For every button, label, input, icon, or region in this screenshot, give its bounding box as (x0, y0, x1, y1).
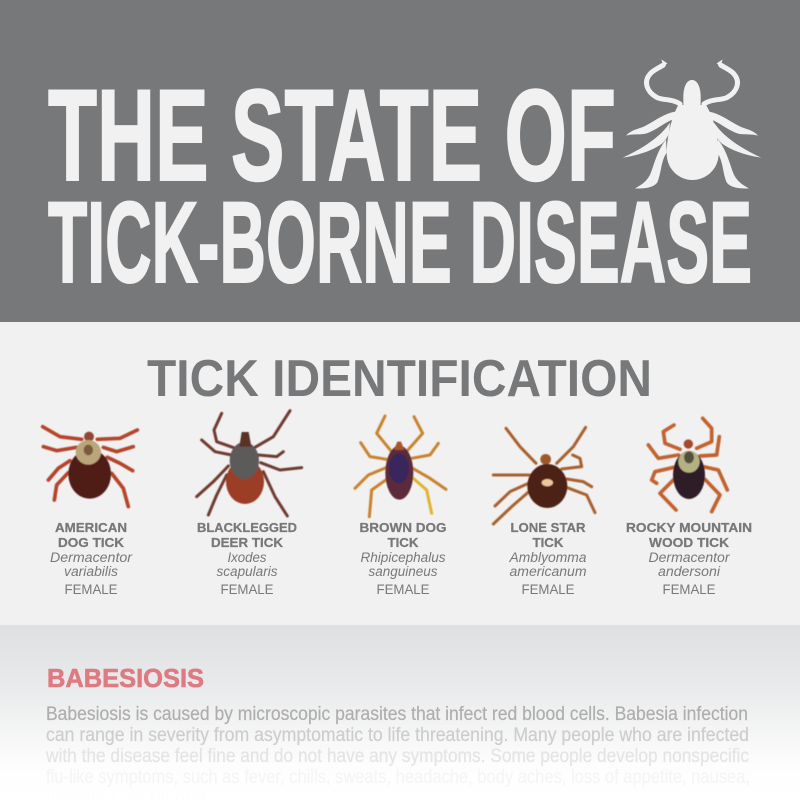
label: american dog tick: Dermacentor (50, 550, 133, 565)
label: lone star tick: americanum (510, 564, 586, 579)
tick photo: brown dog (355, 416, 446, 517)
label: brown dog tick: FEMALE (376, 581, 430, 597)
tick: lone star tick (493, 427, 595, 597)
label: rocky mountain wood tick: Dermacentor (648, 550, 730, 565)
label: rocky mountain wood tick: WOOD TICK (649, 535, 730, 550)
label: brown dog tick (360, 520, 446, 597)
header panel (0, 0, 800, 322)
tick: american dog tick (43, 427, 137, 597)
label: blacklegged deer tick (197, 520, 297, 597)
tick: blacklegged deer tick (197, 411, 302, 597)
label: brown dog tick: TICK (388, 535, 419, 550)
label: lone star tick (508, 520, 587, 597)
tick: brown dog tick (355, 416, 446, 597)
label: lone star tick: LONE STAR (510, 520, 586, 535)
label: rocky mountain wood tick (626, 520, 752, 597)
tick photo: lone star (493, 427, 595, 524)
panel: tick identification (0, 322, 800, 625)
label: american dog tick: variabilis (64, 564, 118, 579)
label: american dog tick (50, 520, 133, 597)
label: rocky mountain wood tick: ROCKY MOUNTAIN (626, 520, 752, 535)
tick photo: rocky mountain wood (648, 418, 727, 512)
text block: babesiosis description: with the disease feel fine and do not have any symptoms. Some people develop nonspecific (45, 746, 749, 767)
label: blacklegged deer tick: FEMALE (220, 581, 274, 597)
tick photo: blacklegged deer (197, 411, 302, 516)
label: rocky mountain wood tick: andersoni (658, 564, 721, 579)
label: blacklegged deer tick: DEER TICK (211, 535, 284, 550)
text block: babesiosis description: Babesiosis is caused by microscopic parasites that infect red blood cells. Babesia infection (46, 704, 748, 725)
text block: babesiosis description: can range in severity from asymptomatic to life threatening. Many people who are infected (46, 725, 749, 746)
label: brown dog tick: Rhipicephalus (360, 550, 446, 565)
tick photo: american dog (43, 427, 137, 507)
label: lone star tick: FEMALE (522, 581, 574, 597)
label: lone star tick: TICK (532, 535, 564, 550)
tick: rocky mountain wood tick (626, 418, 752, 597)
heading: tick identification: TICK IDENTIFICATION (147, 350, 652, 408)
label: brown dog tick: sanguineus (368, 564, 438, 579)
label: rocky mountain wood tick: FEMALE (662, 581, 716, 597)
heading: babesiosis: BABESIOSIS (47, 663, 204, 693)
text block: babesiosis description (45, 704, 750, 800)
label: blacklegged deer tick: scapularis (216, 564, 278, 579)
title (48, 62, 752, 307)
label: brown dog tick: BROWN DOG (360, 520, 446, 535)
icon: tick silhouette (623, 59, 761, 188)
label: american dog tick: DOG TICK (58, 535, 125, 550)
panel: babesiosis (0, 625, 800, 800)
label: blacklegged deer tick: BLACKLEGGED (197, 520, 297, 535)
label: blacklegged deer tick: Ixodes (228, 550, 267, 565)
label: american dog tick: FEMALE (64, 581, 118, 597)
label: lone star tick: Amblyomma (508, 550, 587, 565)
label: american dog tick: AMERICAN (55, 520, 127, 535)
